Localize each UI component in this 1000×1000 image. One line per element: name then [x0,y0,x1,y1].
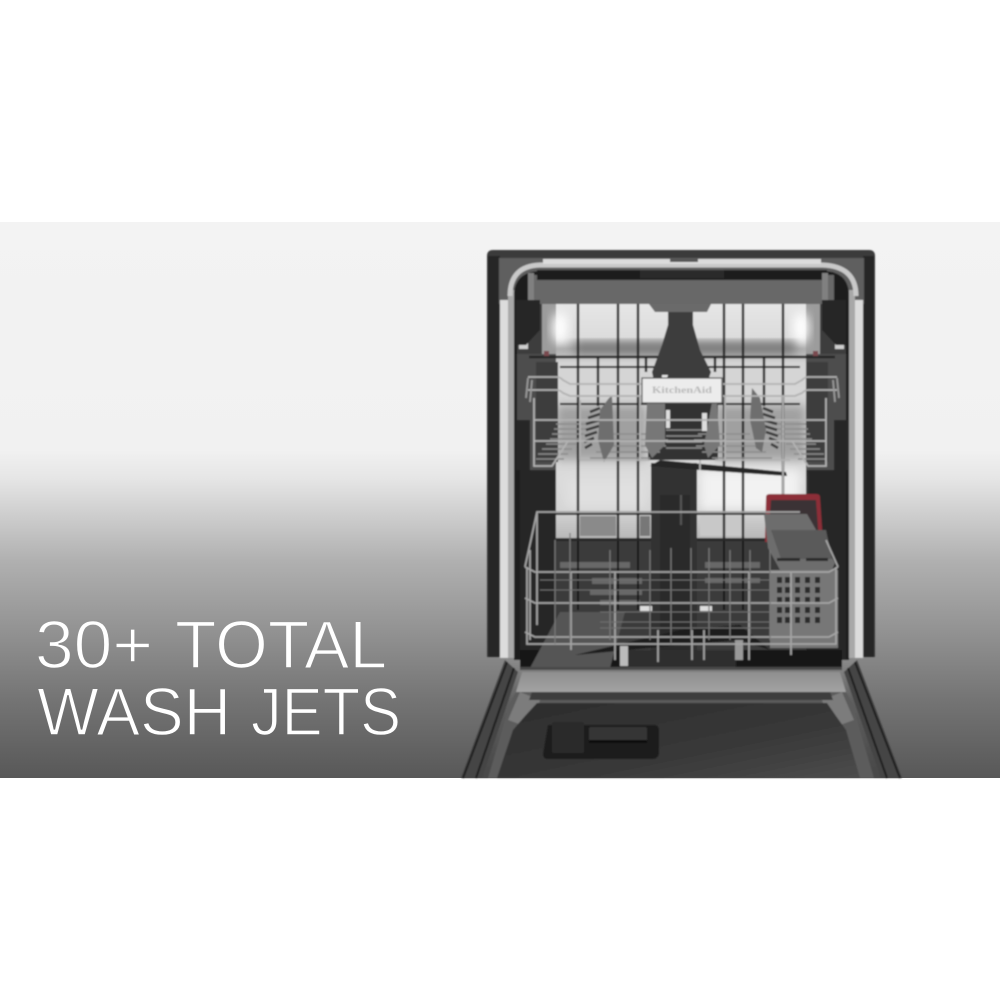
top spray housing [528,270,834,312]
headline line 2 [37,674,401,750]
open door panel [461,660,902,778]
headline line 1: 30+ [35,607,153,683]
lower rack [525,512,838,662]
upper rack plate tines [584,408,779,448]
KitchenAid nameplate [642,378,722,403]
tub interior [514,271,849,660]
headline line 2: WASH [37,674,231,750]
dishwasher [461,250,902,778]
lower tub floor [520,606,842,670]
dark outer frame [487,250,875,657]
KitchenAid nameplate: KitchenAid [652,386,713,396]
back wall vertical grid bars [529,303,835,610]
headline line 2: JETS [251,674,401,750]
detergent dispenser [543,722,659,759]
upper side rails dark [516,300,848,470]
upper spray arm [650,460,787,476]
upper rack frame [526,377,839,500]
headline line 1 [35,607,387,683]
steel door-side trim [500,259,863,658]
background banner [0,222,1000,778]
upper rack plate dividers [598,388,766,462]
headline line 1: TOTAL [175,607,387,683]
upper rack dish tines [536,424,826,459]
cutlery basket [764,494,838,648]
center spray tower [648,312,718,660]
headline [35,607,401,750]
